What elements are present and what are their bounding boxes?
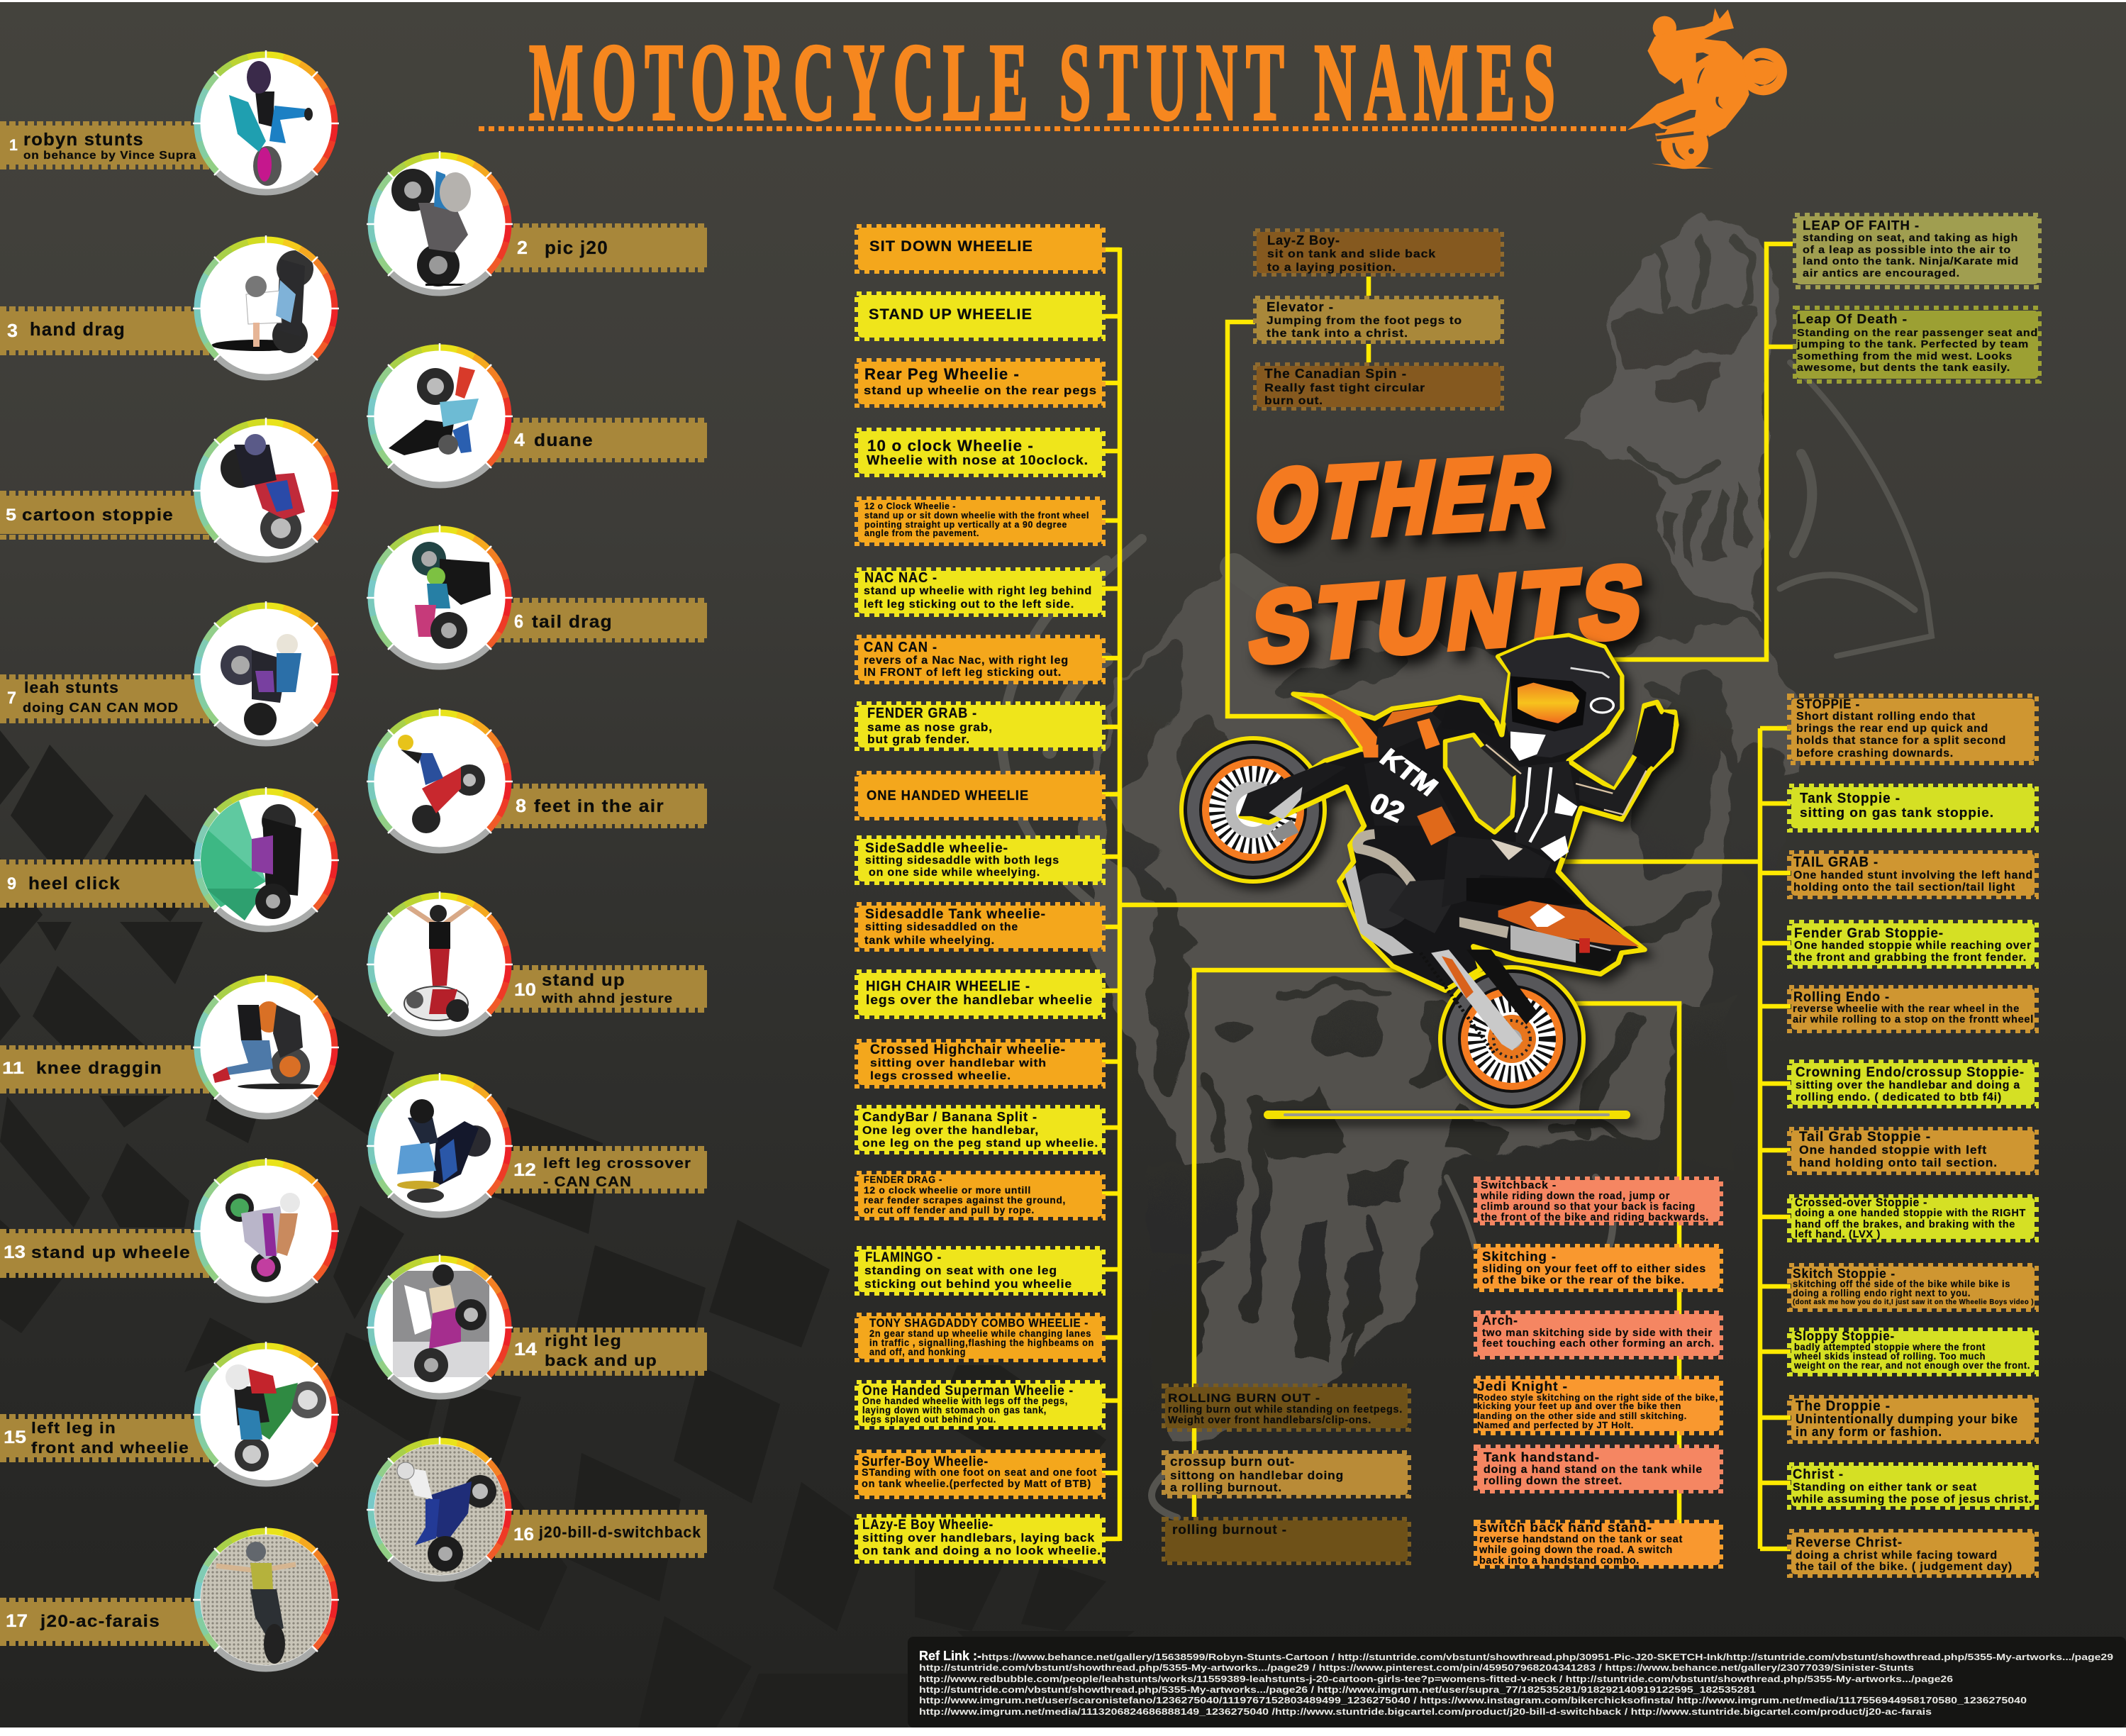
- box: reverse christ: Reverse Christ-: [1796, 1535, 1903, 1550]
- box: tail grab: [1789, 852, 2037, 897]
- box: elevator: the tank into a christ.: [1267, 328, 1408, 340]
- box: fender drag: rear fender scrapes against the ground,: [864, 1195, 1066, 1206]
- box: rolling burnout: rolling burnout -: [1172, 1523, 1287, 1537]
- box: rolling burn out: rolling burn out while standing on feetpegs.: [1168, 1404, 1403, 1415]
- box: crowning endo: Crowning Endo/crossup Stoppie-: [1796, 1065, 2025, 1080]
- panel: reference links: http://stuntride.com/vbstunt/showthread.php/5355-My-artworks.../page26 / http://www.imgrum.net/user/supra_77/182535281/918292140919122595_182535281: [919, 1684, 1756, 1695]
- box: candybar banana split: one leg on the peg stand up wheelie.: [862, 1137, 1098, 1150]
- box: leap of faith: LEAP OF FAITH -: [1803, 218, 1920, 233]
- box: sloppy stoppie: badly attempted stoppie where the front: [1794, 1342, 1986, 1352]
- stunt 1 robyn stunts: [0, 50, 339, 192]
- box: sloppy stoppie: wheel skids instead of rolling. Too much: [1793, 1351, 1986, 1362]
- stunt 7 leah stunts: 7: [7, 689, 16, 708]
- box: one handed superman wheelie: One handed wheelie with legs off the pegs,: [862, 1396, 1068, 1406]
- box: one handed superman wheelie: One Handed Superman Wheelie -: [862, 1384, 1074, 1398]
- box: crowning endo: [1789, 1062, 2037, 1106]
- box: fender grab stoppie: [1789, 922, 2037, 967]
- box: nac nac: NAC NAC -: [864, 570, 937, 586]
- box: switchback: while riding down the road, jump or: [1480, 1191, 1670, 1202]
- stunt 15 left leg in front and wheelie: left leg in: [31, 1419, 116, 1437]
- box: flamingo: [857, 1248, 1103, 1293]
- box: switchback: climb around so that your back is facing: [1481, 1201, 1696, 1213]
- box: rolling burnout: [1164, 1519, 1409, 1563]
- box: lay-z boy: sit on tank and slide back: [1267, 248, 1436, 260]
- box: nac nac: left leg sticking out to the left side.: [864, 599, 1074, 611]
- box: surfer-boy wheelie: [857, 1452, 1103, 1497]
- box: skitch stoppie: Skitch Stoppie -: [1793, 1267, 1896, 1281]
- box: jedi knight: Named and perfected by JT Holt.: [1477, 1420, 1634, 1430]
- box: arch: two man skitching side by side with their: [1482, 1327, 1713, 1339]
- panel: stoppie list: [1789, 696, 2037, 1576]
- box: sloppy stoppie: Sloppy Stoppie-: [1794, 1329, 1895, 1343]
- box: arch: feet touching each other forming an arch.: [1482, 1337, 1715, 1350]
- box: sidesaddle wheelie: on one side while wheelying.: [869, 867, 1040, 879]
- box: lay-z boy: to a laying position.: [1267, 262, 1396, 274]
- box: reverse christ: the tail of the bike. ( judgement day): [1796, 1561, 2013, 1573]
- box: fender grab stoppie: One handed stoppie while reaching over: [1794, 940, 2032, 952]
- title dotted underline: [479, 126, 1627, 131]
- box: the droppie: The Droppie -: [1796, 1398, 1891, 1414]
- box: one handed superman wheelie: laying down with stomach on gas tank,: [862, 1405, 1047, 1415]
- box: tank handstand: Tank handstand-: [1484, 1450, 1600, 1464]
- heading: other stunts: STUNTS: [1244, 545, 1656, 684]
- box: crossed highchair wheelie: [857, 1041, 1103, 1086]
- stunt 8 feet in the air: feet in the air: [534, 796, 664, 816]
- stunt 4 duane: duane: [534, 430, 594, 450]
- box: high chair wheelie: [857, 972, 1103, 1017]
- box: crowning endo: rolling endo. ( dedicated to btb f4i): [1796, 1091, 2002, 1103]
- box: elevator: Elevator -: [1267, 300, 1334, 314]
- box: nac nac: stand up wheelie with right leg behind: [864, 585, 1092, 597]
- box: candybar banana split: [857, 1107, 1103, 1152]
- box: high chair wheelie: HIGH CHAIR WHEELIE -: [866, 979, 1030, 994]
- stunt 14 right leg back and up: back and up: [545, 1352, 657, 1369]
- box: leap of death: something from the mid west. Looks: [1797, 350, 2013, 362]
- stunt 10 stand up with hand gesture: stand up: [542, 971, 625, 990]
- stunt 13 stand up wheele: [0, 1158, 339, 1300]
- box: lazy-e boy wheelie: on tank and doing a no look wheelie.: [862, 1544, 1101, 1557]
- box: leap of faith: of a leap as possible into the air to: [1803, 244, 2011, 256]
- box: crossed-over stoppie: hand off the brakes, and braking with the: [1795, 1218, 2015, 1230]
- box: the canadian spin: The Canadian Spin -: [1264, 367, 1407, 381]
- skull dark cutouts: [1083, 304, 1783, 1418]
- box: leap of death: Standing on the rear passenger seat and: [1797, 327, 2038, 339]
- panel: upper middle stunts: [1255, 230, 1502, 408]
- box: rolling endo: reverse wheelie with the rear wheel in the: [1793, 1003, 2020, 1015]
- stunt 5 cartoon stoppie: 5: [6, 506, 16, 525]
- stunt 5 cartoon stoppie: cartoon stoppie: [22, 506, 174, 525]
- stunt 8 feet in the air: [367, 708, 707, 850]
- stunt 5 cartoon stoppie: [0, 418, 339, 560]
- stunt 16 j20-bill-d-switchback: [367, 1437, 707, 1579]
- box: leap of faith: standing on seat, and taking as high: [1803, 232, 2018, 244]
- box: reverse christ: doing a christ while facing toward: [1796, 1549, 1998, 1562]
- box: tail grab stoppie: hand holding onto tail section.: [1799, 1156, 1998, 1169]
- box: tony shagdaddy combo wheelie: in traffic , signalling,flashing the highbeams on: [869, 1337, 1094, 1348]
- box: tony shagdaddy combo wheelie: TONY SHAGDADDY COMBO WHEELIE -: [869, 1316, 1089, 1330]
- box: switch back hand stand: while going down the road. A switch: [1479, 1545, 1673, 1556]
- box: tank stoppie: [1789, 786, 2037, 830]
- box: flamingo: sticking out behind you wheelie: [864, 1277, 1072, 1291]
- box: skitching: sliding on your feet off to either sides: [1482, 1263, 1706, 1275]
- stunt 4 duane: 4: [514, 429, 525, 450]
- box: crossed highchair wheelie: Crossed Highchair wheelie-: [870, 1042, 1066, 1057]
- stunt 14 right leg back and up: [367, 1254, 707, 1396]
- box: crossed-over stoppie: doing a one handed stoppie with the RIGHT: [1795, 1207, 2026, 1219]
- box: fender grab stoppie: Fender Grab Stoppie-: [1794, 926, 1944, 941]
- box: leap of death: awesome, but dents the tank easily.: [1797, 362, 2010, 374]
- ground bar: [1264, 1111, 1630, 1119]
- box: tail grab: One handed stunt involving the left hand: [1793, 869, 2033, 881]
- stunt 8 feet in the air: 8: [516, 795, 526, 816]
- bike and rider artwork: KTM: [1374, 743, 1443, 801]
- box: leap of death: jumping to the tank. Perfected by team: [1796, 338, 2029, 350]
- box: fender grab: but grab fender.: [867, 733, 970, 746]
- stunt 1 robyn stunts: on behance by Vince Supra: [23, 150, 196, 162]
- box: sidesaddle tank wheelie: Sidesaddle Tank wheelie-: [865, 907, 1046, 922]
- box: fender grab: same as nose grab,: [867, 720, 993, 734]
- box: one handed wheelie: ONE HANDED WHEELIE: [867, 789, 1029, 803]
- box: skitch stoppie: (dont ask me how you do it,I just saw it on the Wheelie Boys video ): [1793, 1298, 2034, 1306]
- box: fender grab: [857, 703, 1103, 749]
- box: sidesaddle tank wheelie: [857, 904, 1103, 950]
- stunt 3 hand drag: 3: [7, 320, 18, 341]
- box: 10 o clock wheelie: 10 o clock Wheelie -: [867, 437, 1034, 455]
- stunt 2 pic j20: pic j20: [545, 237, 608, 258]
- box: stand up wheelie: STAND UP WHEELIE: [869, 306, 1033, 323]
- stunt 9 heel click: [0, 787, 339, 929]
- box: 12 o clock wheelie: [857, 499, 1103, 544]
- box: fender drag: FENDER DRAG -: [864, 1174, 942, 1185]
- panel: reference links: http://www.imgrum.net/media/1113206824686888149_1236275040 /http://www.stuntride.bigcartel.com/product/j20-bill-d-switchback / http://www.stuntride.bigcartel.com/product/j20-ac-farais: [919, 1706, 1932, 1717]
- stunt 6 tail drag: [367, 525, 707, 667]
- illustration: ktm rider wheelie: [1179, 635, 1676, 1119]
- stunt 10 stand up with hand gesture: [367, 891, 707, 1033]
- stunt 17 j20-ac-farais: j20-ac-farais: [40, 1612, 160, 1631]
- stunt 2 pic j20: [367, 151, 707, 293]
- box: crossup burn out: [1164, 1452, 1409, 1496]
- stunt 9 heel click: 9: [7, 874, 16, 894]
- box: stoppie: [1789, 696, 2037, 763]
- box: arch: Arch-: [1482, 1313, 1518, 1328]
- box: one handed superman wheelie: [857, 1382, 1103, 1428]
- box: candybar banana split: One leg over the handlebar,: [862, 1125, 1039, 1137]
- box: lazy-e boy wheelie: sitting over handlebars, laying back: [862, 1531, 1095, 1545]
- skull accent strokes: [1001, 362, 1932, 1518]
- box: tank stoppie: Tank Stoppie -: [1800, 791, 1900, 806]
- box: crossed highchair wheelie: legs crossed wheelie.: [870, 1070, 1011, 1082]
- box: can can: revers of a Nac Nac, with right leg: [864, 655, 1069, 667]
- box: tail grab: holding onto the tail section/tail light: [1793, 881, 2015, 894]
- box: one handed superman wheelie: legs splayed out behind you.: [862, 1414, 996, 1425]
- stunt 12 left leg crossover: 12: [513, 1160, 536, 1180]
- panel: reference links: http://stuntride.com/vbstunt/showthread.php/5355-My-artworks.../page29 / https://www.pinterest.com/pin/459507968204341283 / https://www.behance.net/gallery/23077039/Sinister-Stunts: [919, 1662, 1914, 1673]
- box: lazy-e boy wheelie: LAzy-E Boy Wheelie-: [862, 1518, 994, 1532]
- box: flamingo: FLAMINGO -: [865, 1250, 942, 1265]
- box: stoppie: brings the rear end up quick and: [1796, 723, 1988, 735]
- box: crossup burn out: crossup burn out-: [1170, 1454, 1295, 1469]
- box: jedi knight: [1476, 1378, 1721, 1433]
- box: the canadian spin: burn out.: [1264, 395, 1323, 407]
- box: leap of death: Leap Of Death -: [1797, 312, 1908, 326]
- stunt 7 leah stunts: leah stunts: [24, 679, 119, 696]
- box: fender grab: FENDER GRAB -: [867, 706, 977, 721]
- stunt 9 heel click: heel click: [28, 874, 121, 894]
- box: leap of faith: [1795, 215, 2039, 287]
- box: arch: [1476, 1313, 1721, 1357]
- stunt 4 duane: [367, 343, 707, 485]
- box: rolling endo: Rolling Endo -: [1793, 990, 1890, 1005]
- box: switchback: Switchback -: [1481, 1179, 1557, 1191]
- box: tony shagdaddy combo wheelie: and off, and honking: [869, 1347, 966, 1357]
- stunt 17 j20-ac-farais: 17: [6, 1611, 28, 1631]
- box: nac nac: [857, 569, 1103, 615]
- box: sidesaddle tank wheelie: sitting sidesaddled on the: [865, 921, 1018, 933]
- box: tank handstand: rolling down the street.: [1484, 1475, 1623, 1487]
- box: jedi knight: kicking your feet up and over the bike then: [1477, 1401, 1681, 1411]
- box: sloppy stoppie: weight on the rear, and not enough over the front.: [1793, 1360, 2030, 1371]
- box: switchback: the front of the bike and riding backwards.: [1481, 1212, 1709, 1223]
- box: switch back hand stand: [1476, 1520, 1721, 1567]
- box: sidesaddle wheelie: SideSaddle wheelie-: [865, 841, 1008, 856]
- box: surfer-boy wheelie: on tank wheelie.(perfected by Matt of BTB): [862, 1478, 1091, 1490]
- box: stoppie: before crashing downards.: [1796, 747, 1954, 760]
- box: skitch stoppie: skitching off the side of the bike while bike is: [1793, 1279, 2010, 1289]
- box: tank handstand: doing a hand stand on the tank while: [1484, 1464, 1703, 1476]
- stunt 16 j20-bill-d-switchback: 16: [513, 1525, 534, 1545]
- box: can can: IN FRONT of left leg sticking out.: [864, 667, 1062, 679]
- stunt 12 left leg crossover: - CAN CAN: [543, 1174, 632, 1190]
- panel: wheelie list: [857, 226, 1103, 1562]
- box: crossed-over stoppie: left hand. (LVX ): [1795, 1228, 1881, 1240]
- box: can can: [857, 637, 1103, 682]
- box: elevator: [1255, 298, 1502, 342]
- stunt 16 j20-bill-d-switchback: j20-bill-d-switchback: [538, 1523, 701, 1541]
- box: leap of faith: land onto the tank. Ninja/Karate mid: [1803, 255, 2019, 267]
- box: jedi knight: landing on the other side and still skitching.: [1477, 1410, 1687, 1421]
- box: tail grab stoppie: Tail Grab Stoppie -: [1799, 1130, 1931, 1145]
- box: rolling burn out: ROLLING BURN OUT -: [1168, 1391, 1320, 1405]
- box: fender drag: or cut off fender and pull by rope.: [864, 1205, 1035, 1215]
- box: sit down wheelie: SIT DOWN WHEELIE: [869, 238, 1033, 255]
- box: jedi knight: Rodeo style skitching on the right side of the bike,: [1477, 1392, 1718, 1403]
- box: jedi knight: Jedi Knight -: [1477, 1379, 1568, 1393]
- stunt 13 stand up wheele: stand up wheele: [31, 1243, 191, 1262]
- box: 10 o clock wheelie: Wheelie with nose at 10oclock.: [867, 453, 1089, 467]
- heading: other stunts: OTHER: [1247, 434, 1566, 562]
- stunt 7 leah stunts: doing CAN CAN MOD: [23, 701, 179, 715]
- box: leap of death: [1795, 308, 2039, 382]
- box: tail grab stoppie: [1789, 1129, 2037, 1173]
- box: rolling endo: air while rolling to a stop on the frontt wheel: [1793, 1014, 2034, 1025]
- stunt 14 right leg back and up: right leg: [545, 1332, 622, 1350]
- stunt 6 tail drag: 6: [514, 611, 523, 632]
- box: crossup burn out: sittong on handlebar doing: [1170, 1469, 1344, 1482]
- bike and rider artwork: 02: [1365, 787, 1410, 828]
- panel: reference links: http://www.redbubble.com/people/leahstunts/works/11559389-leahstunts-j-20-cartoon-girls-tee?p=womens-fitted-v-neck / http://stuntride.com/vbstunt/showthread.php/5355-My-artworks.../page26: [919, 1674, 1953, 1684]
- box: crossed-over stoppie: [1789, 1196, 2037, 1240]
- title: MOTORCYCLE STUNT NAMES: [529, 21, 1555, 143]
- box: high chair wheelie: legs over the handlebar wheelie: [866, 993, 1093, 1007]
- box: stand up wheelie: [857, 294, 1103, 339]
- box: tony shagdaddy combo wheelie: 2n gear stand up wheelie while changing lanes: [869, 1328, 1091, 1339]
- box: rear peg wheelie: Rear Peg Wheelie -: [864, 365, 1020, 383]
- stunt 10 stand up with hand gesture: with ahnd jesture: [541, 991, 673, 1006]
- stunt 15 left leg in front and wheelie: front and wheelie: [31, 1439, 189, 1457]
- panel: reference links: Ref Link :-: [919, 1649, 981, 1663]
- box: christ: Standing on either tank or seat: [1793, 1481, 1977, 1493]
- box: switch back hand stand: switch back hand stand-: [1479, 1520, 1652, 1535]
- stunt 10 stand up with hand gesture: 10: [514, 980, 536, 1000]
- box: fender drag: [857, 1173, 1103, 1218]
- box: sidesaddle tank wheelie: tank while wheelying.: [864, 935, 995, 947]
- stunt 11 knee draggin: [0, 974, 339, 1116]
- box: the droppie: Unintentionally dumping your bike: [1796, 1412, 2018, 1426]
- box: skitching: Skitching -: [1482, 1250, 1557, 1264]
- box: the canadian spin: [1255, 365, 1502, 408]
- stunt 6 tail drag: tail drag: [532, 612, 613, 632]
- connector lines: [1102, 244, 1793, 1549]
- box: lazy-e boy wheelie: [857, 1516, 1103, 1562]
- stunt 3 hand drag: [0, 235, 339, 377]
- bike and rider artwork: [1239, 635, 1676, 1054]
- box: rear peg wheelie: [857, 360, 1103, 406]
- box: elevator: Jumping from the foot pegs to: [1267, 315, 1462, 327]
- stunt 11 knee draggin: 11: [2, 1059, 24, 1078]
- box: reverse christ: [1789, 1531, 2037, 1576]
- box: tail grab: TAIL GRAB -: [1793, 855, 1879, 870]
- box: skitching: [1476, 1246, 1721, 1290]
- stunt 15 left leg in front and wheelie: [0, 1342, 339, 1484]
- stunt 13 stand up wheele: 13: [4, 1242, 26, 1262]
- box: stoppie: Short distant rolling endo that: [1796, 711, 1976, 723]
- box: sidesaddle wheelie: [857, 838, 1103, 883]
- front wheel: [1438, 965, 1586, 1113]
- box: rolling endo: [1789, 987, 2037, 1031]
- box: switch back hand stand: back into a handstand combo.: [1479, 1555, 1640, 1567]
- panel: reference links: http://www.imgrum.net/user/scaronistefano/1236275040/1119767152803489499_1236275040 / https://www.instagram.com/bikerchicksofinsta/ http://www.imgrum.net/media/1117556944958170580_1236275040: [919, 1695, 2027, 1706]
- box: stoppie: STOPPIE -: [1796, 697, 1860, 711]
- background skull artwork: [1083, 221, 1801, 1447]
- box: crowning endo: sitting over the handlebar and doing a: [1796, 1079, 2020, 1091]
- box: tank stoppie: sitting on gas tank stoppie.: [1800, 806, 1994, 820]
- panel: numbered stunts left and right: [0, 50, 707, 1669]
- box: surfer-boy wheelie: STanding with one foot on seat and one foot: [862, 1467, 1097, 1479]
- box: tail grab stoppie: One handed stoppie with left: [1799, 1143, 1987, 1157]
- stunt 7 leah stunts: [0, 601, 339, 743]
- skull dark streaks: [1099, 234, 1745, 1362]
- box: surfer-boy wheelie: Surfer-Boy Wheelie-: [862, 1454, 989, 1469]
- stunt 1 robyn stunts: 1: [9, 136, 18, 154]
- box: switch back hand stand: reverse handstand on the tank or seat: [1479, 1534, 1683, 1545]
- stunt 3 hand drag: hand drag: [30, 318, 126, 340]
- box: tony shagdaddy combo wheelie: [857, 1315, 1103, 1360]
- box: rolling burn out: Weight over front handlebars/clip-ons.: [1168, 1415, 1371, 1426]
- panel: reference links: [908, 1637, 2126, 1727]
- box: crossed highchair wheelie: sitting over handlebar with: [870, 1057, 1047, 1069]
- skull: upper helmet figure: [1559, 221, 1779, 620]
- stunt 17 j20-ac-farais: [0, 1527, 339, 1669]
- box: tank handstand: [1476, 1447, 1721, 1491]
- stunt 14 right leg back and up: 14: [514, 1340, 537, 1359]
- box: crossed-over stoppie: Crossed-over Stoppie -: [1795, 1196, 1927, 1209]
- box: 12 o clock wheelie: angle from the pavement.: [864, 528, 979, 538]
- icon: orange stunt bike silhouette: [1627, 9, 1787, 169]
- box: christ: while assuming the pose of jesus christ.: [1792, 1493, 2032, 1506]
- box: fender grab stoppie: the front and grabbing the front fender.: [1794, 952, 2027, 964]
- box: rear peg wheelie: stand up wheelie on the rear pegs: [864, 384, 1097, 397]
- box: skitch stoppie: doing a rolling endo right next to you.: [1793, 1288, 1971, 1298]
- box: leap of faith: air antics are encouraged.: [1803, 267, 1960, 279]
- box: christ: [1789, 1464, 2037, 1508]
- box: lay-z boy: Lay-Z Boy-: [1267, 233, 1340, 247]
- box: candybar banana split: CandyBar / Banana Split -: [862, 1110, 1037, 1124]
- box: the droppie: in any form or fashion.: [1796, 1425, 1942, 1439]
- box: rolling burn out: [1164, 1386, 1409, 1430]
- box: 10 o clock wheelie: [857, 430, 1103, 475]
- box: switchback: [1476, 1179, 1721, 1223]
- panel: burnout stunts: [1164, 1386, 1409, 1563]
- box: can can: CAN CAN -: [864, 640, 937, 655]
- stunt 12 left leg crossover: left leg crossover: [543, 1156, 691, 1172]
- box: one handed wheelie: [857, 773, 1103, 818]
- skull: central mass: [1085, 567, 1801, 1447]
- rear wheel: [1179, 736, 1327, 884]
- stunt 2 pic j20: 2: [517, 237, 528, 258]
- box: lay-z boy: [1255, 230, 1502, 274]
- box: 12 o clock wheelie: pointing straight up vertically at a 90 degree: [864, 520, 1067, 530]
- box: the droppie: [1789, 1397, 2037, 1442]
- panel: reference links: https://www.behance.net/gallery/15638599/Robyn-Stunts-Cartoon / http://stuntride.com/vbstunt/showthread.php/30951-Pic-J20-SKETCH-Ink/http://stuntride.com/vbstunt/showthread.php/5355-My-artworks.../page29: [981, 1652, 2113, 1662]
- stunt 1 robyn stunts: robyn stunts: [23, 130, 144, 150]
- box: flamingo: standing on seat with one leg: [864, 1264, 1057, 1277]
- box: stoppie: holds that stance for a split second: [1796, 735, 2006, 747]
- box: skitch stoppie: [1789, 1265, 2037, 1310]
- box: sit down wheelie: [857, 226, 1103, 272]
- box: crossup burn out: a rolling burnout.: [1170, 1481, 1282, 1494]
- panel: leap stunts: [1795, 215, 2039, 382]
- box: fender drag: 12 o clock wheelie or more untill: [864, 1185, 1031, 1196]
- box: skitching: of the bike or the rear of the bike.: [1482, 1274, 1685, 1286]
- box: sidesaddle wheelie: sitting sidesaddle with both legs: [865, 855, 1059, 867]
- stunt 11 knee draggin: knee draggin: [36, 1059, 162, 1078]
- heading: other stunts: [1244, 434, 1656, 684]
- checkered flag background: [0, 730, 1135, 1727]
- stunt 15 left leg in front and wheelie: 15: [4, 1428, 26, 1447]
- panel: skitching stunts: [1476, 1179, 1721, 1567]
- box: 12 o clock wheelie: stand up or sit down wheelie with the front wheel: [864, 511, 1089, 521]
- box: christ: Christ -: [1793, 1467, 1844, 1482]
- box: the canadian spin: Really fast tight circular: [1264, 382, 1425, 394]
- box: 12 o clock wheelie: 12 o Clock Wheelie -: [864, 501, 956, 511]
- box: sloppy stoppie: [1789, 1329, 2037, 1374]
- stunt 12 left leg crossover: [367, 1073, 707, 1215]
